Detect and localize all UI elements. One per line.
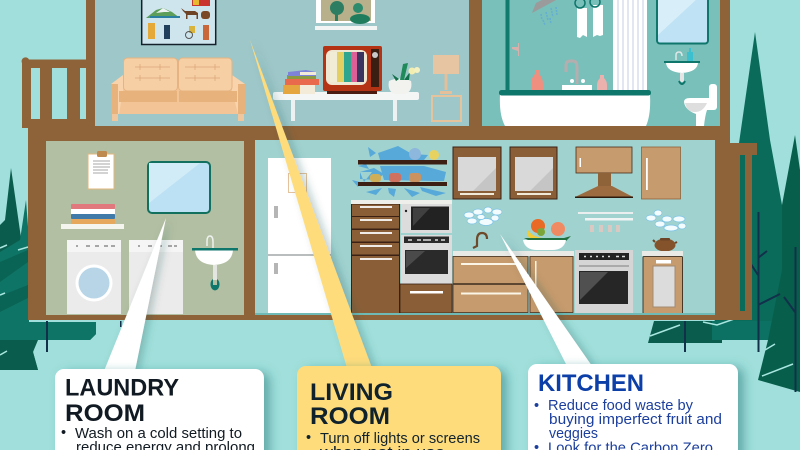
- folded towels: [61, 204, 124, 229]
- shower frame: [506, 0, 510, 92]
- room: kitchen wall: [255, 140, 715, 315]
- room: living room wall: [95, 0, 469, 126]
- tips: kitchen: •: [534, 398, 539, 414]
- plant: [389, 63, 420, 94]
- heading: laundry room: LAUNDRY: [65, 374, 179, 402]
- card: laundry room: [55, 369, 264, 450]
- dryer: [129, 240, 183, 314]
- pointer: laundry room: [104, 218, 166, 371]
- toilet: [684, 84, 717, 126]
- tips: kitchen: veggies: [549, 426, 598, 442]
- heading: laundry room: ROOM: [65, 400, 145, 427]
- wall cabinet 3: [642, 147, 680, 199]
- house structure: [22, 0, 757, 320]
- corner cabinet: [642, 251, 683, 314]
- heading: living room: ROOM: [310, 403, 390, 430]
- wall cabinet 1: [453, 147, 501, 199]
- wall handle: [512, 43, 519, 56]
- tips: living room: Turn off lights or screens: [320, 431, 480, 447]
- wall cabinet 2: [510, 147, 557, 199]
- heading: kitchen: KITCHEN: [538, 370, 644, 397]
- television: [323, 46, 382, 94]
- living room furniture: [111, 0, 461, 121]
- towels: [575, 0, 603, 38]
- trees: right: [648, 32, 800, 392]
- sofa: [111, 58, 245, 121]
- fruit bowl: [523, 219, 571, 250]
- wall splash: sink: [464, 207, 502, 226]
- open shelves: [352, 146, 447, 197]
- tips: laundry room: •: [61, 425, 66, 441]
- clipboard: [88, 151, 114, 189]
- built-in oven: [401, 235, 452, 284]
- laundry room fixtures: [61, 151, 238, 314]
- teapot: [653, 238, 677, 252]
- counter top left: [351, 200, 452, 204]
- tips: laundry room: Wash on a cold setting to: [75, 426, 242, 442]
- heading: living room: LIVING: [310, 379, 393, 406]
- range oven: [575, 250, 633, 313]
- kitchen fixtures: [255, 146, 715, 315]
- framed picture: [315, 0, 377, 30]
- glass rack: [578, 212, 633, 232]
- lower drawer: [400, 284, 452, 313]
- basin: [664, 48, 700, 84]
- shower curtain: [613, 0, 647, 92]
- wall splash: right: [646, 210, 686, 231]
- range hood: [575, 147, 633, 198]
- tips: kitchen: Reduce food waste by: [548, 398, 694, 414]
- tips: living room: •: [306, 430, 311, 446]
- bathroom fixtures: [499, 0, 717, 126]
- room: laundry wall: [46, 141, 244, 315]
- tall cabinet drawers: [351, 204, 400, 314]
- counter top centre: [453, 251, 574, 256]
- mirror: [657, 0, 708, 44]
- books: [283, 70, 319, 94]
- card: living room: [297, 366, 501, 450]
- trees: left: [0, 168, 122, 370]
- card: kitchen: [528, 364, 738, 450]
- lamp and side table: [432, 55, 461, 121]
- bathtub: [499, 90, 651, 126]
- kitchen faucet: [473, 233, 487, 248]
- fridge: [268, 158, 331, 314]
- utility sink: [192, 236, 238, 290]
- pointer: living room: [250, 40, 372, 368]
- pointer: kitchen: [500, 234, 592, 366]
- base cabinets: [453, 256, 573, 312]
- floor strip: [255, 313, 715, 315]
- soap bottles: [531, 70, 607, 90]
- tap: [562, 61, 592, 90]
- shower head: [532, 0, 557, 25]
- microwave: [401, 204, 452, 233]
- shelf: [273, 92, 419, 121]
- poster: [142, 0, 216, 44]
- window: [148, 162, 210, 213]
- washing machine: [67, 240, 121, 314]
- room: bathroom wall: [482, 0, 720, 126]
- tips: kitchen: buying imperfect fruit and: [549, 412, 722, 428]
- timber frame: [22, 0, 757, 320]
